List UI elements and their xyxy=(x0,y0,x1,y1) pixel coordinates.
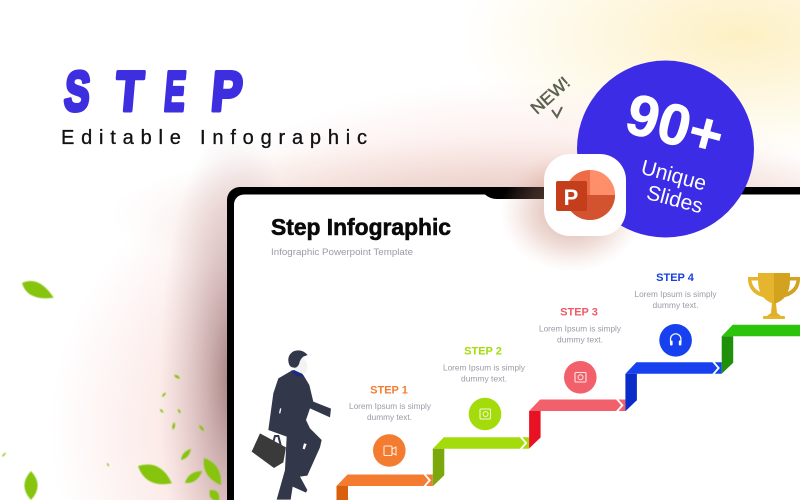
slide subheading: Infographic Powerpoint Template xyxy=(271,247,413,258)
body xyxy=(268,371,331,500)
badge text xyxy=(619,81,731,218)
step 3 label: STEP 3 xyxy=(560,306,598,318)
new label: NEW! xyxy=(527,73,574,118)
subtitle: Editable Infographic xyxy=(61,127,367,149)
step 1 label: dummy text. xyxy=(367,412,412,422)
icon shadow xyxy=(500,152,644,272)
falling leaves xyxy=(1,277,226,500)
step 1 label: Lorem Ipsum is simply xyxy=(349,401,432,411)
step 3 label: Lorem Ipsum is simply xyxy=(539,324,622,334)
title: STEP: S xyxy=(62,62,93,123)
staircase arrows xyxy=(336,325,800,500)
step 1 band: orange xyxy=(336,474,433,500)
businessman figure xyxy=(252,350,331,500)
step 1 label: STEP 1 xyxy=(370,384,408,396)
badge text: Slides xyxy=(644,181,705,218)
briefcase handle xyxy=(273,436,281,445)
badge text: Unique xyxy=(639,156,709,195)
step 3 label xyxy=(539,306,622,344)
icon: headphones xyxy=(659,324,692,357)
powerpoint icon: P xyxy=(564,185,578,210)
step 4 band: blue xyxy=(625,362,722,411)
collar xyxy=(291,370,303,377)
face xyxy=(294,357,308,374)
title: STEP xyxy=(62,60,245,123)
badge circle xyxy=(577,60,754,238)
briefcase xyxy=(252,433,286,468)
pocket and shirt marks xyxy=(279,408,307,449)
slide heading: Step Infographic xyxy=(271,214,451,240)
step 2 label: STEP 2 xyxy=(464,346,502,358)
step 4 label: Lorem Ipsum is simply xyxy=(634,289,717,299)
icon: video camera xyxy=(373,434,406,467)
title: STEP: T xyxy=(113,60,146,123)
title: STEP: P xyxy=(209,60,245,123)
powerpoint icon xyxy=(544,154,626,236)
hair xyxy=(288,350,308,368)
title: STEP: E xyxy=(162,60,188,123)
step 4 label: dummy text. xyxy=(652,300,698,310)
step 1 label xyxy=(349,384,432,422)
step 3 band: red xyxy=(529,400,625,448)
laptop frame xyxy=(227,187,800,500)
step 3 label: dummy text. xyxy=(557,334,603,344)
final band: green xyxy=(722,325,800,374)
step 4 label xyxy=(634,272,717,310)
step 2 label: dummy text. xyxy=(461,374,507,384)
icon: photo xyxy=(469,398,501,430)
step 2 band: lime xyxy=(433,437,529,486)
step 2 label: Lorem Ipsum is simply xyxy=(443,362,526,372)
step 4 label: STEP 4 xyxy=(656,272,695,284)
icon: camera xyxy=(564,361,597,394)
icon: trophy xyxy=(748,273,800,319)
step 2 label xyxy=(443,346,526,384)
badge text: 90+ xyxy=(619,81,731,169)
